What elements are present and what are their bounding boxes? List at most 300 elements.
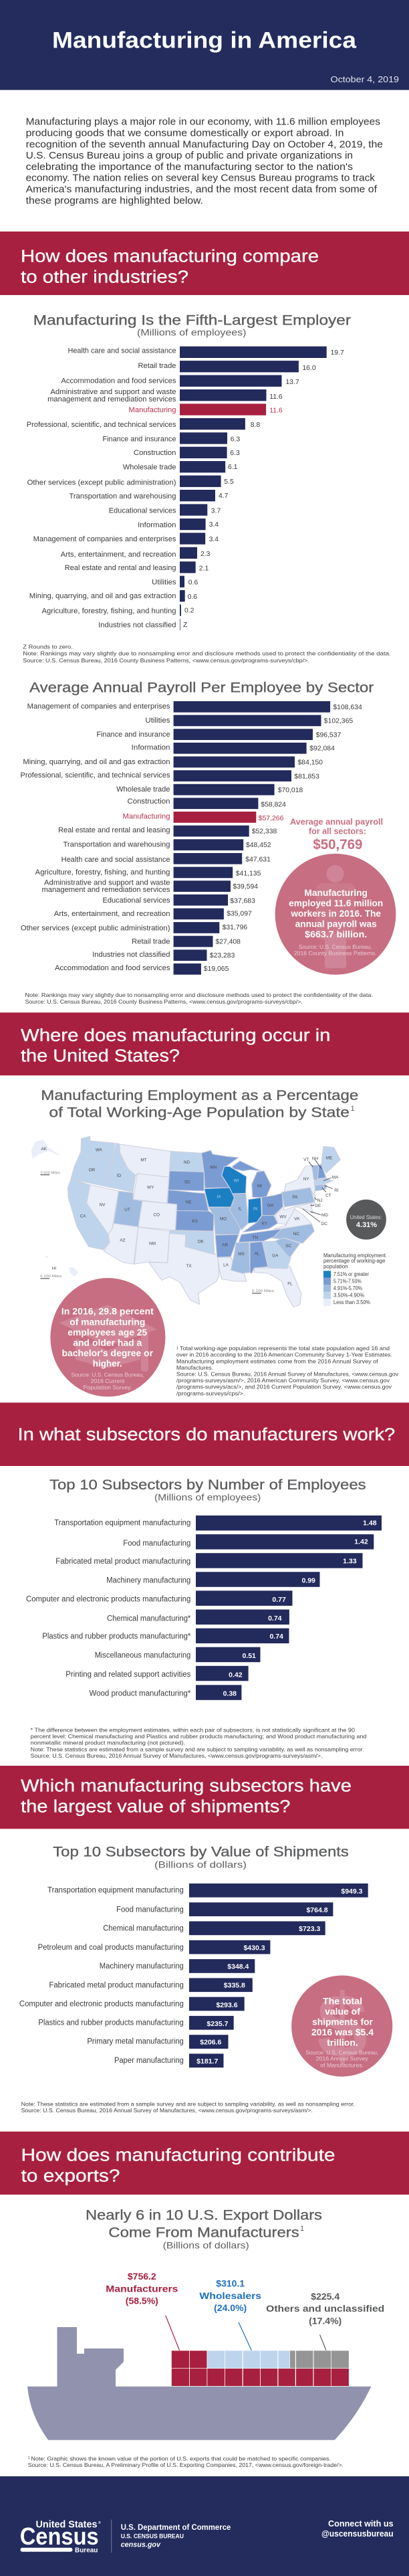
chart note: shipments: Source: U.S. Census Bureau, 2016 Annual Survey of Manufactures, <www.census.gov/programs-surveys/asm/>. xyxy=(21,2107,313,2114)
chart note: employees subsectors: nonmetallic mineral product manufacturing (not pictured). xyxy=(31,1740,185,1746)
logo: United States Census Bureau: Census xyxy=(20,2522,99,2550)
label: wholesalers: (24.0%) xyxy=(214,2302,247,2313)
bar row: Accommodation: $19,065 xyxy=(204,965,229,973)
callout circle: manufacturing employed 11.6 million: $663.7 billion. xyxy=(305,929,367,939)
bar row: Management xyxy=(33,533,219,545)
bar row: Computer and electronic: 0.77 xyxy=(272,1596,286,1604)
chart title: top 10 by employees: Top 10 Subsectors by Number of Employees xyxy=(49,1477,366,1493)
callout: United States 4.31%: United States: xyxy=(350,1214,382,1220)
callout: average annual payroll for all sectors: Average annual payroll xyxy=(290,816,383,827)
state labels: MN xyxy=(210,1165,217,1170)
callout circle: bachelor's degree: In 2016, 29.8 percent xyxy=(61,1307,154,1317)
bar row: Transportation equipment: Transportation equipment manufacturing xyxy=(54,1520,190,1528)
bar row: Finance: 6.3 xyxy=(231,436,240,443)
bar row: Fabricated metal: $335.8 xyxy=(224,1982,245,1990)
map legend: 5.71%-7.50% xyxy=(333,1278,362,1285)
bar row: Educational: 3.7 xyxy=(211,507,221,515)
map footnote: Manufacturing employment estimates come from the 2016 Annual Survey of xyxy=(176,1358,378,1364)
callout circle: total value of shipments xyxy=(291,1975,392,2077)
state labels: TN xyxy=(252,1235,258,1240)
bar row: Plastics and rubber xyxy=(42,1629,289,1643)
callout circle: bachelor's degree: Source: U.S. Census Bureau, xyxy=(71,1371,144,1378)
icon: person silhouette xyxy=(316,865,356,968)
bar row: Machinery: Machinery manufacturing xyxy=(100,1962,184,1970)
bar row: Miscellaneous: 0.51 xyxy=(242,1652,256,1660)
bar row: Retail: Retail trade xyxy=(132,938,170,946)
bar row: Fabricated metal: Fabricated metal product manufacturing xyxy=(55,1558,190,1566)
intro text block: U.S. Census Bureau joins a group of public and private organizations in xyxy=(26,151,353,161)
chart title: top 10 by employees: (Millions of employees) xyxy=(154,1492,261,1503)
state labels: DC xyxy=(321,1222,327,1226)
bar row: Administrative: management and remediation services xyxy=(47,395,176,403)
bar row: Real estate: $52,338 xyxy=(252,828,277,835)
state labels: HI xyxy=(52,1267,56,1271)
agency text: census.gov xyxy=(121,2541,161,2549)
bar row: Transportation equipment xyxy=(47,1883,368,1898)
state labels: VT xyxy=(303,1158,309,1162)
chart note: employment xyxy=(23,643,391,664)
bar row: Industries not classified xyxy=(98,619,188,630)
bar row: Accommodation xyxy=(61,375,299,387)
containers: top row xyxy=(172,2351,349,2368)
state labels: NH xyxy=(312,1156,318,1161)
bar row: Machinery: 0.99 xyxy=(301,1576,315,1584)
label: others and unclassified: Others and unclassified xyxy=(266,2303,384,2314)
icon: graduation cap xyxy=(59,1305,157,1372)
map footnote: 1 xyxy=(176,1346,178,1350)
bar chart: top 10 subsectors by employees xyxy=(26,1515,382,1700)
state labels: OK xyxy=(198,1239,204,1244)
chart title: top 10 by shipments xyxy=(53,1843,349,1870)
intro text block: Manufacturing plays a major role in our economy, with 11.6 million employees xyxy=(26,117,380,128)
chart title: fifth-largest employer: Manufacturing Is the Fifth-Largest Employer xyxy=(33,312,351,329)
bar row: Manufacturing highlighted: $57,266 xyxy=(259,815,284,822)
chart note: employees subsectors: percent level: Chemical manufacturing and Plastics and rubber products manufacturing; and Wood product manufacturing and xyxy=(31,1733,367,1740)
chart note: exports xyxy=(28,2455,344,2468)
bar row: Administrative: Administrative and support and waste xyxy=(44,879,170,887)
bar row: Finance xyxy=(96,729,341,740)
bar row: Mining: $84,150 xyxy=(297,759,323,766)
chart note: exports: 1 xyxy=(28,2456,30,2460)
callout circle: manufacturing employed 11.6 million: workers in 2016. The xyxy=(290,909,382,919)
bar row: Retail xyxy=(132,936,241,947)
bar row: Construction xyxy=(134,447,240,458)
callout circle: bachelor's degree: of manufacturing xyxy=(70,1317,145,1327)
map footnote: /programs-surveys/cps/>. xyxy=(176,1390,245,1396)
state labels: SC xyxy=(285,1244,292,1249)
bar row: Transportation: $48,452 xyxy=(246,842,271,849)
bar row: Primary metal: $206.6 xyxy=(200,2038,222,2046)
bar row: Health care: $47,631 xyxy=(245,856,271,864)
state labels: MA xyxy=(332,1175,339,1180)
bar row: Chemical: Chemical manufacturing* xyxy=(107,1615,191,1623)
chart note: payroll: Note: Rankings may vary slightly due to nonsampling error and disclosure methods used to protect the confidentiality of the data. xyxy=(25,992,373,998)
map footnote: over in 2016 according to the 2016 American Community Survey 1-Year Estimates. xyxy=(176,1352,392,1358)
state labels: KY xyxy=(262,1222,268,1226)
intro text block: recognition of the seventh annual Manufacturing Day on October 4, 2019, the xyxy=(26,139,383,150)
bar row: Management: Management of companies and enterprises xyxy=(33,535,176,543)
bar row: Plastics and rubber: Plastics and rubber products manufacturing* xyxy=(42,1633,191,1641)
callout circle: total value of shipments: 2016 was $5.4 xyxy=(311,2027,374,2037)
state labels: AK xyxy=(41,1147,47,1152)
bar chart: payroll by sector xyxy=(20,701,362,975)
bar row: Information: Information xyxy=(132,744,170,752)
bar row: Agriculture: Agriculture, forestry, fishing, and hunting xyxy=(35,868,170,877)
state labels: IL xyxy=(238,1206,242,1211)
map: United States choropleth xyxy=(31,1136,340,1307)
state labels: IN xyxy=(253,1207,258,1212)
chart note: payroll: Source: U.S. Census Bureau, 2016 County Business Patterns, <www.census.gov/programs-surveys/cbp/>. xyxy=(25,998,303,1005)
state labels: CA xyxy=(80,1214,86,1218)
bar row: Management: $108,634 xyxy=(333,704,362,711)
bar row: Chemical xyxy=(103,1922,325,1935)
callout: average annual payroll for all sectors: for all sectors: xyxy=(309,826,366,836)
bar row: Utilities xyxy=(145,715,353,726)
bar row: Other services: $31,796 xyxy=(223,924,247,931)
bar row: Manufacturing highlighted: Manufacturing xyxy=(123,812,170,820)
bar row: Real estate xyxy=(65,561,209,573)
bar row: Machinery: Machinery manufacturing xyxy=(106,1576,190,1584)
bar row: Management: Management of companies and enterprises xyxy=(27,703,170,711)
bar row: Professional xyxy=(20,770,319,781)
state labels xyxy=(41,1147,339,1286)
bar row: Food xyxy=(123,1534,374,1550)
map legend: Less than 3.50% xyxy=(333,1299,370,1305)
bar row: Transportation xyxy=(70,490,229,501)
state labels: AL xyxy=(255,1251,260,1256)
bar row: Petroleum and coal: Petroleum and coal products manufacturing xyxy=(38,1944,184,1952)
bar row: Petroleum and coal: $430.3 xyxy=(243,1944,265,1952)
chart note: employment: Note: Rankings may vary slightly due to nonsampling error and disclosure methods used to protect the confidentiality of the data. xyxy=(23,650,391,657)
bar row: Fabricated metal xyxy=(55,1553,362,1568)
state labels: MT xyxy=(140,1158,147,1162)
bar row: Printing: Printing and related support activities xyxy=(65,1671,191,1679)
bar row: Industries not classified: Industries not classified xyxy=(92,951,170,959)
bar row: Computer and electronic: Computer and electronic products manufacturing xyxy=(19,2000,184,2008)
bar row: Computer and electronic xyxy=(19,1997,245,2011)
bar row: Transportation equipment: $949.3 xyxy=(341,1888,363,1896)
state labels: NE xyxy=(186,1200,192,1204)
callout: average annual payroll for all sectors: $50,769 xyxy=(313,837,362,852)
state labels: NJ xyxy=(317,1198,322,1203)
bar row: Machinery xyxy=(100,1959,255,1973)
callout circle: bachelor's degree: and older had a xyxy=(73,1338,142,1348)
bar row: Health care: 19.7 xyxy=(330,349,344,357)
chart title: export dollars: (Billions of dollars) xyxy=(163,2240,249,2251)
state labels: DE xyxy=(315,1204,321,1208)
bar row: Wood product: 0.38 xyxy=(223,1689,237,1697)
bar row: Educational: $37,683 xyxy=(230,897,255,905)
agency text: U.S. CENSUS BUREAU xyxy=(121,2533,184,2540)
state labels: TX xyxy=(186,1264,192,1269)
bar row: Paper: $181.7 xyxy=(196,2057,218,2065)
chart title: average annual payroll: Average Annual Payroll Per Employee by Sector xyxy=(29,679,374,695)
panel: page header xyxy=(0,0,409,90)
bar row: Arts: Arts, entertainment, and recreation xyxy=(54,910,170,918)
bar row: Transportation equipment: 1.48 xyxy=(363,1519,377,1527)
bar row: Other services xyxy=(27,476,234,487)
bar row: Finance: $96,537 xyxy=(316,731,341,739)
chart title: export dollars xyxy=(86,2207,322,2251)
bar row: Transportation equipment xyxy=(54,1515,382,1531)
bar row: Health care: Health care and social assistance xyxy=(61,856,170,864)
label: wholesalers: Wholesalers xyxy=(199,2290,261,2301)
state labels: KS xyxy=(192,1219,198,1224)
bar row: Arts xyxy=(54,909,252,919)
section heading: compare to other industries: to other industries? xyxy=(21,268,188,287)
bar row: Arts: $35,097 xyxy=(227,911,252,918)
bar row: Other services: 5.5 xyxy=(224,478,234,486)
bar row: Mining: Mining, quarrying, and oil and gas extraction xyxy=(23,758,170,766)
bar row: Chemical: 0.74 xyxy=(268,1615,282,1623)
bar row: Transportation equipment: Transportation equipment manufacturing xyxy=(47,1886,184,1894)
bar row: Construction: Construction xyxy=(134,449,176,457)
bar row: Administrative: Administrative and support and waste xyxy=(50,388,176,396)
state labels: SD xyxy=(184,1180,190,1185)
bar row: Paper xyxy=(114,2053,223,2067)
bar row: Utilities: Utilities xyxy=(145,717,170,725)
chart note: shipments: Note: These statistics are estimated from a sample survey and are subject to sampling variability, as well as nonsampling error. xyxy=(21,2100,355,2107)
bar row: Food: Food manufacturing xyxy=(123,1540,190,1548)
bar row: Information xyxy=(132,743,335,754)
state labels: RI xyxy=(334,1188,339,1193)
callout circle: bachelor's degree: employees age 25 xyxy=(67,1327,148,1338)
section heading: value of shipments: Which manufacturing subsectors have xyxy=(21,1776,352,1795)
cargo ship with containers xyxy=(27,2327,371,2440)
bar row: Fabricated metal: 1.33 xyxy=(343,1558,357,1566)
section heading: exports: to exports? xyxy=(21,2167,120,2186)
bar row: Transportation xyxy=(63,839,271,850)
map legend: percentage of working-age xyxy=(323,1258,386,1264)
intro text block: economy. The nation relies on several key Census Bureau programs to track xyxy=(26,173,376,184)
section heading: compare to other industries: How does manufacturing compare xyxy=(21,248,319,266)
bar row: Industries not classified: Industries not classified xyxy=(98,621,176,629)
label: manufacturers: $756.2 xyxy=(128,2271,156,2282)
state labels: FL xyxy=(287,1281,293,1286)
section heading: subsectors: In what subsectors do manufacturers work? xyxy=(17,1425,395,1444)
section heading: where does manufacturing occur: Where does manufacturing occur in xyxy=(21,1026,330,1045)
social handle xyxy=(321,2518,394,2539)
bar row: Accommodation: Accommodation and food services xyxy=(55,964,170,972)
label: others and unclassified: $225.4 xyxy=(311,2291,339,2302)
callout: United States 4.31%: 4.31% xyxy=(356,1221,377,1229)
intro text block: celebrating the importance of the manufacturing sector to the nation's xyxy=(26,162,353,173)
state labels: OH xyxy=(267,1204,274,1208)
logo: United States Census Bureau: United States xyxy=(36,2519,98,2531)
chart note: employees subsectors xyxy=(31,1727,367,1759)
intro text block: America's manufacturing industries, and the most recent data from some of xyxy=(26,185,377,195)
bar row: Other services: Other services (except public administration) xyxy=(27,479,176,487)
bar row: Information: $92,084 xyxy=(309,745,335,753)
bar row: Chemical xyxy=(107,1610,289,1625)
callout circle: bachelor's degree: higher. xyxy=(93,1359,122,1369)
bar row: Professional xyxy=(27,418,260,430)
bar row: Wood product xyxy=(90,1685,241,1700)
label: manufacturers: Manufacturers xyxy=(106,2283,178,2294)
bar row: Fabricated metal xyxy=(49,1978,253,1992)
logo: United States Census Bureau: Bureau xyxy=(75,2546,98,2554)
bar row: Administrative: 11.6 xyxy=(269,393,283,401)
bar row: Information: 3.4 xyxy=(209,521,219,529)
bar row: Wholesale xyxy=(116,784,303,795)
callout circle: total value of shipments: of Manufactures. xyxy=(320,2061,364,2068)
callout circle: manufacturing employed 11.6 million: employed 11.6 million xyxy=(289,898,383,908)
map scale bars: 0 500 Miles xyxy=(40,1171,61,1175)
callout circle: manufacturing employed 11.6 million: 2016 County Business Patterns. xyxy=(294,949,377,956)
map footnote: /programs-surveys/acs/>, and 2016 Current Population Survey, <www.census.gov xyxy=(176,1384,392,1390)
panel: footer xyxy=(0,2476,409,2576)
bar row: Wholesale: Wholesale trade xyxy=(116,786,170,794)
callout circle: total value of shipments: Source: U.S. Census Bureau, xyxy=(305,2049,378,2055)
bar row: Manufacturing highlighted: Manufacturing xyxy=(128,406,176,414)
bar row: Plastics and rubber: $235.7 xyxy=(207,2020,229,2028)
map footnote xyxy=(176,1345,399,1396)
map legend xyxy=(323,1253,386,1306)
map scale bars: 0 100 Miles xyxy=(252,1289,275,1293)
bar row: Food: Food manufacturing xyxy=(116,1906,184,1914)
chart title: top 10 by shipments: (Billions of dollars) xyxy=(154,1859,247,1870)
bar row: Computer and electronic: Computer and electronic products manufacturing xyxy=(26,1595,190,1603)
state labels: LA xyxy=(223,1263,229,1268)
bar row: Manufacturing highlighted: 11.6 xyxy=(269,407,283,415)
state labels: OR xyxy=(89,1168,96,1172)
state labels: WV xyxy=(279,1214,287,1219)
section heading: where does manufacturing occur xyxy=(0,1012,409,1075)
state labels: GA xyxy=(272,1254,279,1259)
label: manufacturers xyxy=(106,2271,179,2351)
bar row: Plastics and rubber: 0.74 xyxy=(269,1633,283,1641)
bar row: Finance xyxy=(103,432,240,444)
map scale bars xyxy=(40,1171,275,1293)
bar row: Paper: Paper manufacturing xyxy=(114,2057,184,2065)
bar row: Administrative xyxy=(41,879,258,894)
callout: average annual payroll for all sectors xyxy=(290,816,383,852)
bar row: Other services xyxy=(21,922,247,933)
section heading: exports xyxy=(0,2132,409,2195)
bar row: Educational: Educational services xyxy=(109,507,176,515)
map footnote: Manufactures. xyxy=(176,1364,213,1371)
bar row: Retail trade: Retail trade xyxy=(138,362,176,370)
chart title: employment percentage by state: 1 xyxy=(350,1105,355,1113)
bar row: Wood product: Wood product manufacturing* xyxy=(90,1689,191,1697)
bar row: Retail trade: 16.0 xyxy=(302,365,316,372)
bar row: Mining xyxy=(29,590,197,602)
bar row: Educational xyxy=(109,504,221,516)
state labels: AR xyxy=(222,1243,229,1248)
state labels: NM xyxy=(149,1242,156,1247)
bar row: Management: 3.4 xyxy=(209,536,219,543)
bar row: Health care xyxy=(68,347,344,358)
section heading: compare to other industries xyxy=(0,232,409,295)
date: October 4, 2019 xyxy=(330,74,399,84)
callout circle: manufacturing employed 11.6 million: Source: U.S. Census Bureau, xyxy=(299,943,372,950)
bar row: Manufacturing highlighted xyxy=(128,403,283,416)
section heading: exports: How does manufacturing contribute xyxy=(21,2146,335,2165)
bar row: Administrative xyxy=(47,388,283,403)
map footnote: Total working-age population represents the total state population aged 16 and xyxy=(180,1345,390,1352)
chart title: export dollars: Come From Manufacturers xyxy=(108,2225,299,2241)
bar row: Utilities: 0.6 xyxy=(188,579,198,586)
bar row: Wholesale: 6.1 xyxy=(228,464,238,471)
bar row: Industries not classified: Z xyxy=(183,622,188,629)
bar row: Chemical: $723.3 xyxy=(299,1925,320,1933)
bar row: Educational xyxy=(103,895,255,906)
bar row: Real estate: Real estate and rental and leasing xyxy=(58,826,170,834)
bar row: Retail trade xyxy=(138,361,316,372)
social handle: @uscensusbureau xyxy=(321,2528,394,2539)
bar row: Management xyxy=(27,701,362,713)
bar row: Agriculture xyxy=(41,604,194,616)
bar row: Primary metal xyxy=(87,2035,229,2049)
bar row: Agriculture: 0.2 xyxy=(184,608,194,614)
bar row: Chemical: Chemical manufacturing xyxy=(103,1925,184,1933)
state labels: NY xyxy=(303,1177,309,1182)
chart note: employees subsectors: * The difference between the employment estimates, within each pair of subsectors, is not statistically significant at the 90 xyxy=(31,1727,355,1734)
bar row: Real estate: 2.1 xyxy=(199,565,209,573)
bar row: Educational: Educational services xyxy=(103,897,170,905)
callout circle: manufacturing employed 11.6 million: Manufacturing xyxy=(304,888,368,898)
label: manufacturers: (58.5%) xyxy=(126,2296,158,2306)
chart note: employment: Z Rounds to zero. xyxy=(23,643,73,650)
section heading: where does manufacturing occur: the United States? xyxy=(21,1047,180,1066)
bar row: Health care: Health care and social assistance xyxy=(68,347,176,355)
chart note: exports: Source: U.S. Census Bureau, A Preliminary Profile of U.S. Exporting Companies, 2017, <www.census.gov/foreign-trade/>. xyxy=(28,2462,344,2468)
bar row: Wholesale: $70,018 xyxy=(278,787,303,794)
intro text block xyxy=(26,117,383,206)
chart note: employment: Source: U.S. Census Bureau, 2016 County Business Patterns, <www.census.gov/programs-surveys/cbp/>. xyxy=(23,657,309,664)
bar row: Construction xyxy=(127,798,286,809)
bar row: Plastics and rubber: Plastics and rubber products manufacturing xyxy=(38,2019,184,2027)
state labels: MI xyxy=(257,1184,262,1188)
map legend: population xyxy=(323,1263,348,1269)
bar row: Manufacturing highlighted xyxy=(123,812,284,823)
chart title: export dollars: 1 xyxy=(300,2225,304,2233)
bar row: Accommodation: 13.7 xyxy=(285,379,299,386)
state labels: NV xyxy=(100,1202,106,1207)
bar row: Information xyxy=(138,519,219,530)
bar row: Computer and electronic xyxy=(26,1590,293,1606)
state labels: AZ xyxy=(120,1238,126,1243)
label: others and unclassified: (17.4%) xyxy=(309,2315,342,2326)
callout circle: bachelor's degree: bachelor's degree or xyxy=(61,1348,154,1358)
state labels: IA xyxy=(217,1194,221,1199)
social handle: Connect with us xyxy=(328,2518,394,2528)
intro text block: these programs are highlighted below. xyxy=(26,195,203,206)
map footnote: /programs-surveys/asm/>, 2016 American Community Survey, <www.census.gov xyxy=(176,1377,390,1384)
map footnote: Source: U.S. Census Bureau, 2016 Annual Survey of Manufactures, <www.census.gov xyxy=(176,1371,399,1378)
bar row: Arts: Arts, entertainment, and recreation xyxy=(61,551,176,559)
bar row: Agriculture: Agriculture, forestry, fishing, and hunting xyxy=(41,608,176,616)
bar row: Mining xyxy=(23,756,323,767)
callout circle: total value of shipments: 2016 Annual Survey xyxy=(316,2055,368,2062)
chart title: top 10 by employees xyxy=(49,1477,366,1503)
callout circle: manufacturing employed 11.6 million xyxy=(275,854,396,975)
bar row: Transportation: 4.7 xyxy=(219,492,229,500)
bar chart: employees by sector xyxy=(27,347,344,630)
map legend: 3.50%-4.90% xyxy=(333,1293,364,1298)
label: wholesalers xyxy=(199,2278,261,2351)
bar row: Mining: 0.6 xyxy=(188,593,197,601)
bar row: Information: Information xyxy=(138,521,176,529)
state labels: ME xyxy=(326,1156,332,1160)
bar row: Finance: Finance and insurance xyxy=(103,435,176,443)
chart title: fifth-largest employer xyxy=(33,312,351,338)
agency text: U.S. Department of Commerce xyxy=(121,2524,231,2532)
bar row: Computer and electronic: $293.6 xyxy=(216,2001,238,2009)
bar row: Machinery: $348.4 xyxy=(227,1963,249,1971)
bar row: Agriculture: $41,135 xyxy=(236,870,261,877)
bar row: Utilities: $102,365 xyxy=(324,717,353,725)
